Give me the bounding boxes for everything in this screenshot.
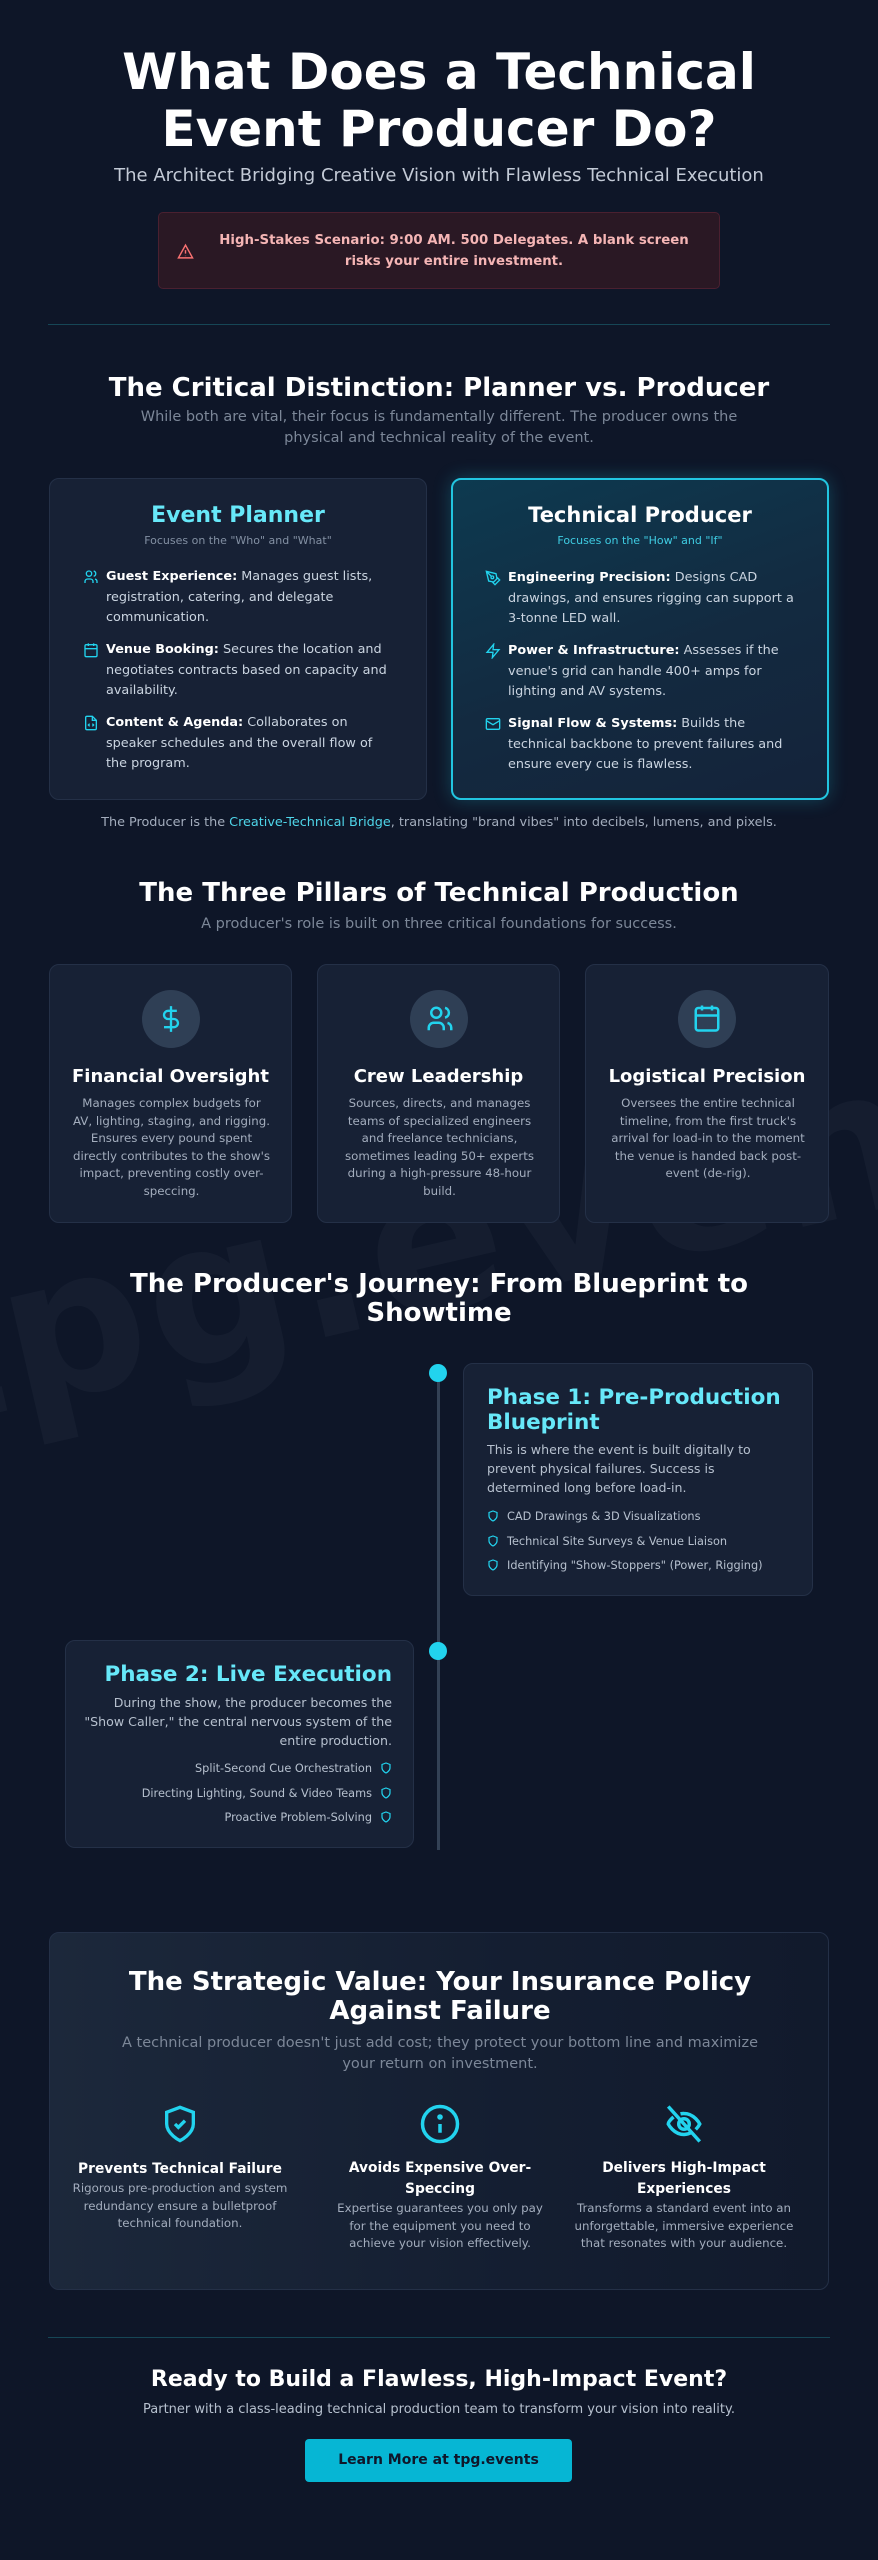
icon: warning xyxy=(177,244,194,259)
phase 2 bullets: Directing Lighting, Sound & Video Teams xyxy=(142,1786,372,1800)
item: engineering: Engineering Precision: Designs CAD drawings, and ensures rigging can support a 3-tonne LED wall. xyxy=(508,570,794,626)
panel: event planner xyxy=(49,478,427,800)
value: high impact xyxy=(575,2105,793,2250)
alert text: High-Stakes Scenario: 9:00 AM. 500 Delegates. A blank screen risks your entire investment. xyxy=(219,233,689,269)
subheading: A producer's role is built on three critical foundations for success. xyxy=(201,916,677,932)
timeline xyxy=(429,1364,447,1850)
value: prevents failure: Rigorous pre-production and system redundancy ensure a bulletproof technical foundation. xyxy=(73,2181,287,2230)
bridge statement: The Producer is the Creative-Technical Bridge, translating "brand vibes" into decibels, lumens, and pixels. xyxy=(101,815,777,830)
panel: strategic value xyxy=(49,1932,829,2290)
heading: pillars: The Three Pillars of Technical Production xyxy=(139,878,739,908)
alert box xyxy=(158,212,720,289)
item: signal: Signal Flow & Systems: Builds the technical backbone to prevent failures and ensure every cue is flawless. xyxy=(508,716,782,772)
phase 2 bullets xyxy=(142,1762,391,1824)
dot 1 xyxy=(429,1364,447,1382)
title: Event Producer Do? xyxy=(161,100,717,158)
value: prevents failure: Prevents Technical Failure xyxy=(78,2161,282,2177)
phase 2 bullets: Split-Second Cue Orchestration xyxy=(195,1762,372,1775)
phase 2 bullets: Proactive Problem-Solving xyxy=(224,1811,372,1824)
pillar text: Oversees the entire technical timeline, from the first truck's arrival for load-in to the moment the venue is handed back post-event (de-rig). xyxy=(611,1096,805,1180)
item: guest: Guest Experience: Manages guest lists, registration, catering, and delegate communication. xyxy=(106,569,372,625)
phase 1 text: This is where the event is built digitally to prevent physical failures. Success is determined long before load-in. xyxy=(487,1442,751,1495)
phase 1 bullets: Identifying "Show-Stoppers" (Power, Rigging) xyxy=(507,1559,763,1572)
pillar: logistics xyxy=(585,964,829,1223)
panel: technical producer xyxy=(451,478,829,800)
heading: journey: The Producer's Journey: From Blueprint to Showtime xyxy=(130,1269,748,1328)
CTA heading: Ready to Build a Flawless, High-Impact Event? xyxy=(151,2367,727,2392)
pillar: financial xyxy=(49,964,292,1223)
value: high impact: Transforms a standard event into an unforgettable, immersive experience that resonates with your audience. xyxy=(575,2201,793,2250)
icon: eye off xyxy=(666,2105,702,2143)
pillar: crew xyxy=(317,964,560,1223)
value: high impact: Delivers High-Impact Experiences xyxy=(602,2160,766,2197)
pillar title: Crew Leadership xyxy=(354,1066,523,1087)
pillar title: Financial Oversight xyxy=(72,1066,269,1087)
pillar title: Logistical Precision xyxy=(609,1066,805,1087)
CTA button xyxy=(305,2439,572,2482)
subtitle: The Architect Bridging Creative Vision with Flawless Technical Execution xyxy=(114,165,764,186)
icon: calendar xyxy=(678,990,736,1048)
item: content: Content & Agenda: Collaborates on speaker schedules and the overall flow of the program. xyxy=(106,715,372,771)
phase 2 title: Phase 2: Live Execution xyxy=(104,1662,392,1687)
value: prevents failure xyxy=(73,2106,287,2230)
value: avoids overspeccing: Avoids Expensive Over-Speccing xyxy=(349,2160,531,2197)
title: What Does a Technical xyxy=(122,43,756,101)
pillar text: Sources, directs, and manages teams of specialized engineers and freelance technicians, sometimes leading 50+ experts during a high-pressure 48-hour build. xyxy=(345,1096,534,1198)
strategic title: The Strategic Value: Your Insurance Policy Against Failure xyxy=(129,1967,751,2026)
item: power: Power & Infrastructure: Assesses if the venue's grid can handle 400+ amps for lighting and AV systems. xyxy=(508,643,779,699)
phase 1 bullets xyxy=(488,1510,763,1572)
pillar text: Manages complex budgets for AV, lighting, staging, and rigging. Ensures every pound spent directly contributes to the show's impact, preventing costly over-speccing. xyxy=(73,1096,270,1198)
phase 1 bullets: Technical Site Surveys & Venue Liaison xyxy=(507,1534,727,1548)
producer title: Technical Producer xyxy=(528,503,752,527)
producer subtitle: Focuses on the "How" and "If" xyxy=(557,534,723,547)
dot 2 xyxy=(429,1642,447,1660)
icon: dollar xyxy=(142,990,200,1048)
icon: users xyxy=(410,990,468,1048)
CTA subtitle: Partner with a class-leading technical production team to transform your vision into reality. xyxy=(143,2402,735,2417)
icon: shield check xyxy=(165,2106,195,2142)
subheading: While both are vital, their focus is fundamentally different. The producer owns the physical and technical reality of the event. xyxy=(141,409,737,446)
items xyxy=(84,569,387,771)
planner title: Event Planner xyxy=(151,503,325,528)
icon: info xyxy=(420,2104,460,2144)
phase 2 text: During the show, the producer becomes the "Show Caller," the central nervous system of the entire production. xyxy=(84,1695,392,1748)
title xyxy=(122,43,756,158)
value: avoids overspeccing xyxy=(337,2104,543,2250)
phase 1 bullets: CAD Drawings & 3D Visualizations xyxy=(507,1510,700,1523)
strategic subtitle: A technical producer doesn't just add cost; they protect your bottom line and maximize your return on investment. xyxy=(122,2035,758,2072)
planner subtitle: Focuses on the "Who" and "What" xyxy=(144,534,332,547)
item: venue: Venue Booking: Secures the location and negotiates contracts based on capacity and availability. xyxy=(106,642,387,698)
value: avoids overspeccing: Expertise guarantees you only pay for the equipment you need to achieve your vision effectively. xyxy=(337,2201,543,2250)
phase 1 title: Phase 1: Pre-Production Blueprint xyxy=(487,1385,781,1435)
items xyxy=(486,570,794,772)
phase 1 card xyxy=(463,1363,813,1596)
heading: distinction: The Critical Distinction: Planner vs. Producer xyxy=(109,373,769,403)
CTA button: Learn More at tpg.events xyxy=(338,2452,539,2468)
phase 2 card xyxy=(65,1640,414,1848)
